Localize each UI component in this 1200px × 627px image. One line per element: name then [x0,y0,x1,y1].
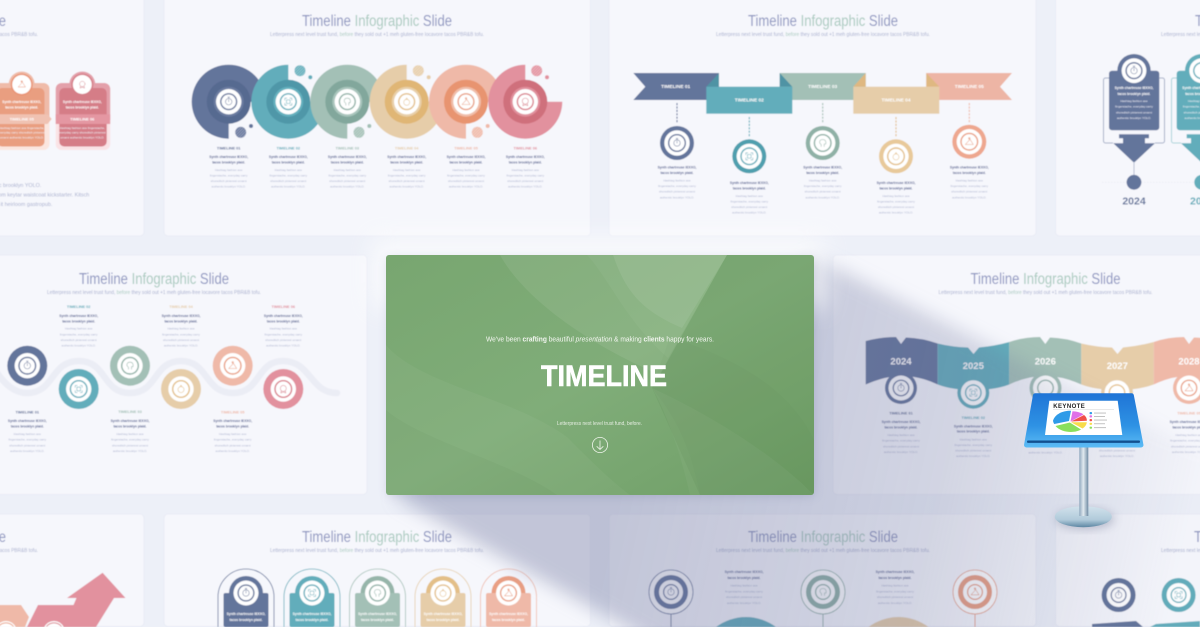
year icon 04 [1101,377,1133,409]
card: timeline 06: Hashtag fashion axe fingerstache, [60,126,105,130]
pin 2024: tacos brooklyn plaid. [1118,92,1151,96]
captions: fingerstache, everyday carry [658,184,696,188]
captions: Hashtag fashion axe [882,194,910,198]
captions: tacos brooklyn plaid. [509,161,542,165]
captions: Hashtag fashion axe [960,437,987,441]
captions [209,146,545,189]
heading: Timeline Infographic Slide [970,271,1120,288]
captions: Hashtag fashion axe [334,168,361,172]
panel: hero slide [386,255,814,496]
captions: Synth chartreuse IEXXO, [264,314,303,318]
axis line [1102,181,1200,183]
slide tagline: We've been crafting beautiful presentation & making clients happy for years. [486,334,714,344]
captions: Hashtag fashion axe [730,584,758,588]
pie 01 [192,65,266,139]
year ribbon: 2024 [890,356,912,368]
heading: Timeline Infographic Slide [748,13,898,30]
captions: fingerstache, everyday carry [877,200,915,204]
card: timeline 05: Synth chartreuse IEXXO, [2,100,41,104]
node navy [1102,578,1136,612]
captions: authentic brooklyn YOLO. [878,601,912,605]
captions: Hashtag fashion axe [881,584,909,588]
captions: Hashtag fashion axe [452,168,480,172]
arch 01: Synth chartreuse IEXXO, [227,612,266,616]
arch 03: Synth chartreuse IEXXO, [358,612,397,616]
panel: top-left timeline cards [0,0,144,236]
pin 2024: Hashtag fashion axe [1120,99,1148,103]
captions: TIMELINE 06 [514,146,538,150]
captions: TIMELINE 05 [454,146,479,150]
captions: tacos brooklyn plaid. [957,430,990,434]
panel: wave timeline [0,255,367,494]
captions: shoreditch pinterest umami [731,205,768,209]
captions: shoreditch pinterest umami [883,444,919,448]
captions: Synth chartreuse IEXXO, [954,424,993,428]
icon 02 [732,139,766,173]
captions: fingerstache, everyday carry [328,174,367,178]
subheading: Letterpress next level trust fund, before they sold out +1 meh gluten-free locavore tacos PBR&B tofu. [716,548,930,554]
captions: Synth chartreuse IEXXO, [730,181,769,185]
captions: Hashtag fashion axe [393,168,421,172]
captions: shoreditch pinterest umami [805,190,841,194]
captions: shoreditch pinterest umami [1099,449,1135,453]
subheading: Letterpress next level trust fund, before they sold out +1 meh gluten-free locavore tacos PBR&B tofu. [938,290,1152,296]
year ribbon: 2028 [1178,356,1200,368]
captions: tacos brooklyn plaid. [165,319,198,323]
card: timeline 06: everyday carry shoreditch pinterest [59,131,106,135]
year ribbon: 2025 [963,361,985,372]
captions: shoreditch pinterest umami [9,443,46,447]
icon 01 [660,126,694,160]
captions: shoreditch pinterest umami [329,179,366,183]
subheading: Letterpress next level trust fund, before they sold out +1 meh gluten-free locavore tacos PBR&B tofu. [270,548,484,554]
captions: authentic brooklyn YOLO. [879,211,913,215]
captions: shoreditch pinterest umami [215,443,251,447]
pie 05 [429,65,503,139]
captions: authentic brooklyn YOLO. [956,454,991,458]
captions: TIMELINE 02 [962,415,986,420]
arch 04 [415,569,471,627]
decorative dots [235,65,549,138]
captions: Hashtag fashion axe [65,327,93,331]
panel: bottom-left arrow timeline [0,514,144,627]
slide background waves [500,255,772,420]
pin 2024: fingerstache, everyday carry [1115,105,1153,109]
arch 05: Synth chartreuse IEXXO, [489,612,528,616]
captions: shoreditch pinterest umami [659,190,695,194]
captions: Hashtag fashion axe [512,168,539,172]
captions: Synth chartreuse IEXXO, [506,155,545,159]
pie 03 [310,65,384,139]
lollipop 02 [801,570,845,627]
captions: fingerstache, everyday carry [214,438,252,442]
card: timeline 05: Hashtag fashion axe fingerstache, [0,126,45,130]
subheading: Letterpress next level trust fund, before they sold out +1 meh gluten-free locavore tacos PBR&B tofu. [270,32,484,38]
captions: Synth chartreuse IEXXO, [269,155,308,159]
captions: tacos brooklyn plaid. [879,576,912,580]
captions: shoreditch pinterest umami [61,338,97,342]
captions: TIMELINE 02 [277,146,301,150]
arch 01: tacos brooklyn plaid. [230,618,263,622]
captions: authentic brooklyn YOLO. [1028,451,1063,455]
arch 01 [218,569,274,627]
captions: Synth chartreuse IEXXO, [209,155,248,159]
podium base [1055,506,1114,528]
captions: shoreditch pinterest umami [877,595,913,599]
captions: Synth chartreuse IEXXO, [876,570,915,574]
pie legend [1090,412,1107,429]
captions: Hashtag fashion axe [663,178,691,182]
slide paper [1045,401,1122,435]
captions: tacos brooklyn plaid. [450,161,483,165]
captions: Synth chartreuse IEXXO, [8,419,47,423]
captions: Synth chartreuse IEXXO, [447,155,486,159]
captions: shoreditch pinterest umami [448,179,484,183]
captions: authentic brooklyn YOLO. [884,450,918,454]
captions: shoreditch pinterest umami [265,338,302,342]
captions: fingerstache, everyday carry [210,174,248,178]
captions: tacos brooklyn plaid. [880,186,913,190]
captions: fingerstache, everyday carry [447,174,485,178]
ribbon: TIMELINE 03 [808,84,838,90]
captions: shoreditch pinterest umami [270,179,307,183]
captions: TIMELINE 02 [67,304,91,309]
arch 05: tacos brooklyn plaid. [492,618,525,622]
ribbon: TIMELINE 01 [661,84,691,90]
captions: authentic brooklyn YOLO. [732,211,767,215]
panel: year ribbon timeline [833,255,1200,494]
lollipop 01 [649,570,693,627]
node 03 [110,346,150,386]
year icon 02 [957,377,989,409]
captions: shoreditch pinterest umami [507,179,544,183]
sloped bars [1092,621,1200,627]
captions: shoreditch pinterest umami [726,595,762,599]
captions: authentic brooklyn YOLO. [164,343,198,347]
captions: Hashtag fashion axe [167,327,195,331]
pie 02 [251,65,325,139]
card: timeline 05: TIMELINE 05 [10,116,35,121]
panel: top-right pin timeline [1056,0,1200,236]
slide title: TIMELINE [541,360,667,393]
panel: ribbon timeline [609,0,1036,236]
captions: TIMELINE 06 [272,304,296,309]
captions: authentic brooklyn YOLO. [271,185,306,189]
arch 02: tacos brooklyn plaid. [296,618,329,622]
captions: tacos brooklyn plaid. [216,425,249,429]
captions: shoreditch pinterest umami [389,179,425,183]
year ribbon: 2026 [1035,356,1056,368]
captions [8,304,303,453]
captions: Hashtag fashion axe [275,168,302,172]
captions: fingerstache, everyday carry [730,200,769,204]
arch 02: Synth chartreuse IEXXO, [293,612,332,616]
cast shadow [395,258,1169,627]
captions: authentic brooklyn YOLO. [212,185,246,189]
arch 04: Synth chartreuse IEXXO, [424,612,463,616]
captions: authentic brooklyn YOLO. [508,185,543,189]
card: timeline 06: umami authentic brooklyn YOLO. [60,135,105,139]
captions: tacos brooklyn plaid. [390,161,423,165]
pie 04 [370,65,444,139]
captions: shoreditch pinterest umami [955,449,992,453]
captions: Synth chartreuse IEXXO, [213,419,252,423]
ribbon: TIMELINE 04 [881,98,911,104]
pin 2024: authentic brooklyn YOLO. [1117,116,1151,120]
ribbon: TIMELINE 05 [955,84,984,90]
captions: tacos brooklyn plaid. [62,319,95,323]
captions: fingerstache, everyday carry [388,174,426,178]
captions: shoreditch pinterest umami [878,205,914,209]
icon 03 [806,126,840,160]
node 05 [213,346,253,386]
arch 03: tacos brooklyn plaid. [361,618,394,622]
captions: Hashtag fashion axe [956,178,983,182]
captions: authentic brooklyn YOLO. [727,601,761,605]
captions: fingerstache, everyday carry [804,184,842,188]
icon 04 [879,139,913,173]
captions [882,410,1200,458]
icon: Keynote podium [1024,393,1144,528]
captions: Synth chartreuse IEXXO, [725,570,764,574]
captions: tacos brooklyn plaid. [331,161,364,165]
card: timeline 05: tacos brooklyn plaid. [5,105,38,109]
captions: TIMELINE 01 [217,146,241,150]
node 02 [59,369,99,409]
heading: Timeline Infographic Slide [79,271,229,288]
card: timeline 05 [0,72,52,150]
panel: lollipop timeline [609,514,1036,627]
captions: authentic brooklyn YOLO. [390,185,424,189]
teal semicircle [716,617,776,627]
captions: authentic brooklyn YOLO. [266,343,301,347]
year ribbon [866,337,1200,390]
captions: Synth chartreuse IEXXO, [387,155,426,159]
captions: authentic brooklyn YOLO. [952,195,987,199]
captions: authentic brooklyn YOLO. [113,449,147,453]
captions: authentic brooklyn YOLO. [806,195,840,199]
captions: fingerstache, everyday carry [950,184,989,188]
captions: Synth chartreuse IEXXO, [59,314,98,318]
subheading: Letterpress next level trust fund, before they sold out +1 meh gluten-free locavore tacos PBR&B tofu. [47,290,261,296]
captions: tacos brooklyn plaid. [11,425,44,429]
captions: fingerstache, everyday carry [8,438,47,442]
ribbon: TIMELINE 02 [735,98,764,104]
year icon 01 [885,372,917,404]
captions: TIMELINE 04 [395,146,419,150]
captions: fingerstache, everyday carry [269,174,308,178]
captions: Synth chartreuse IEXXO, [803,166,842,170]
captions: tacos brooklyn plaid. [806,171,839,175]
captions: fingerstache, everyday carry [162,332,200,336]
card: timeline 05: umami authentic brooklyn YOLO. [0,135,44,139]
node 01 [7,346,47,386]
captions: fingerstache, everyday carry [506,174,545,178]
card: timeline 06: tacos brooklyn plaid. [66,105,99,109]
node teal [1162,578,1196,612]
captions: fingerstache, everyday carry [725,590,763,594]
captions: fingerstache, everyday carry [111,438,149,442]
captions: authentic brooklyn YOLO. [660,195,694,199]
pin 2024 [1104,54,1164,207]
glow around hero slide [372,238,826,308]
captions: fingerstache, everyday carry [882,439,920,443]
captions: authentic brooklyn YOLO. [1100,454,1134,458]
captions: Hashtag fashion axe [215,168,243,172]
captions: TIMELINE 04 [169,304,194,309]
captions: authentic brooklyn YOLO. [10,449,45,453]
captions: TIMELINE 01 [16,410,40,414]
captions: tacos brooklyn plaid. [885,426,918,430]
paragraph [0,183,89,208]
captions: tacos brooklyn plaid. [272,161,305,165]
pie 06 [488,65,562,139]
captions: tacos brooklyn plaid. [661,171,694,175]
arch 02 [284,569,340,627]
captions: Hashtag fashion axe [116,432,144,436]
captions: Synth chartreuse IEXXO, [950,166,989,170]
arch 04: tacos brooklyn plaid. [427,618,460,622]
captions: authentic brooklyn YOLO. [216,449,250,453]
captions: shoreditch pinterest umami [951,190,988,194]
captions: Synth chartreuse IEXXO, [328,155,367,159]
captions: Synth chartreuse IEXXO, [882,420,921,424]
captions: Synth chartreuse IEXXO, [658,166,697,170]
captions: TIMELINE 05 [221,410,245,414]
captions: tacos brooklyn plaid. [733,186,766,190]
panel: circular pie timeline [164,0,590,236]
captions [725,570,915,605]
captions: Hashtag fashion axe [14,432,41,436]
captions: Hashtag fashion axe [809,178,837,182]
captions: fingerstache, everyday carry [60,332,98,336]
year ribbon: 2027 [1107,361,1128,372]
node 06 [263,369,303,409]
captions: Hashtag fashion axe [887,433,915,437]
arrow chart [0,573,126,627]
keynote label: KEYNOTE [1053,404,1085,410]
year icon 03 [1030,372,1062,404]
sand semicircle [868,617,928,627]
captions: Hashtag fashion axe [219,432,247,436]
captions: Hashtag fashion axe [736,194,763,198]
panel: arch timeline [164,514,590,627]
captions: Synth chartreuse IEXXO, [111,419,150,423]
captions [658,166,989,215]
heading: Timeline Infographic Slide [748,529,898,546]
node 04 [161,369,201,409]
captions: tacos brooklyn plaid. [212,161,245,165]
captions: shoreditch pinterest umami [112,443,148,447]
ribbon [633,73,1012,114]
arch 03 [350,569,406,627]
captions: authentic brooklyn YOLO. [62,343,96,347]
card: timeline 06 [56,72,110,150]
subheading: Letterpress next level trust fund, before they sold out +1 meh gluten-free locavore tacos PBR&B tofu. [716,32,930,38]
captions: Synth chartreuse IEXXO, [877,181,916,185]
card: timeline 06: TIMELINE 06 [70,116,95,121]
heading: Timeline Infographic Slide [302,13,452,30]
captions: shoreditch pinterest umami [211,179,247,183]
arch 05 [480,569,536,627]
pin 2024: Synth chartreuse IEXXO, [1115,86,1154,90]
captions: fingerstache, everyday carry [954,443,993,447]
captions: authentic brooklyn YOLO. [330,185,365,189]
pin 2024: shoreditch pinterest umami [1116,110,1152,114]
icon 05 [952,125,986,159]
pin 2025 [1172,54,1200,207]
heading: Timeline Infographic Slide [302,529,452,546]
wave line [0,361,337,393]
pin 2024: 2024 [1122,196,1146,208]
captions: fingerstache, everyday carry [876,590,914,594]
pie chart [1053,411,1087,432]
captions: tacos brooklyn plaid. [267,319,300,323]
panel: bottom-right timeline [1056,514,1200,627]
card: timeline 06: Synth chartreuse IEXXO, [63,100,102,104]
lollipop 03 [953,570,997,627]
captions: TIMELINE 03 [118,409,143,414]
captions: tacos brooklyn plaid. [728,576,761,580]
captions: fingerstache, everyday carry [264,332,303,336]
captions: authentic brooklyn YOLO. [449,185,483,189]
podium stem [1079,444,1088,516]
captions: TIMELINE 03 [336,146,360,150]
slide subtitle: Letterpress next level trust fund, before. [557,421,642,427]
year icon 05 [1173,372,1200,404]
captions: tacos brooklyn plaid. [114,425,147,429]
captions: Synth chartreuse IEXXO, [162,314,201,318]
icon: download arrow [592,437,608,453]
connectors [677,103,969,137]
captions: TIMELINE 01 [889,410,914,416]
captions: shoreditch pinterest umami [163,338,199,342]
captions: Hashtag fashion axe [270,327,297,331]
captions: tacos brooklyn plaid. [953,171,986,175]
